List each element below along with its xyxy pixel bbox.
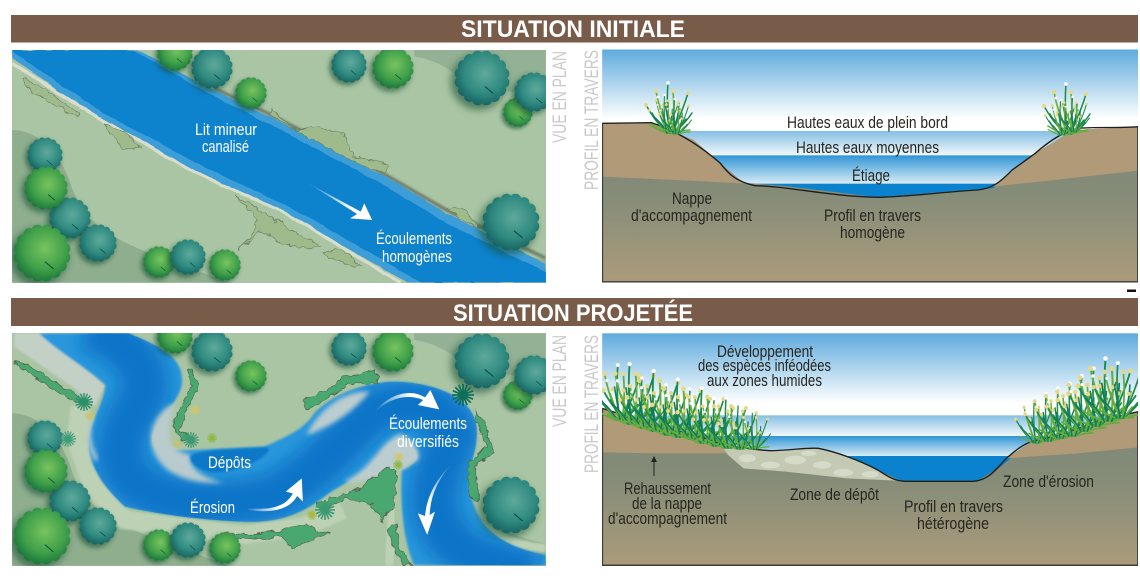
panel: vue en plan projetée — [12, 333, 546, 566]
vegetation: rive gauche — [591, 362, 770, 449]
side labels: situation projetée: PROFIL EN TRAVERS — [582, 335, 603, 473]
vegetation: rive droite — [1042, 82, 1090, 135]
label: écoulements diversifiés — [389, 414, 467, 451]
side labels: situation initiale — [550, 50, 603, 190]
label: nappe d'accompagnement: d'accompagnement — [631, 207, 752, 225]
label: zone d'érosion: Zone d'érosion — [1003, 473, 1094, 491]
label: dépôts: Dépôts — [208, 454, 251, 472]
panel: profil en travers initial — [602, 50, 1138, 282]
label: écoulements homogènes — [376, 229, 452, 266]
panel: vue en plan initiale — [12, 50, 546, 283]
panel: profil en travers projeté — [602, 333, 1138, 566]
label: développement des espèces — [698, 343, 831, 390]
label: écoulements diversifiés: diversifiés — [397, 433, 459, 451]
labels: niveaux d'eau initiaux — [787, 114, 948, 185]
labels: niveaux d'eau initiaux: Hautes eaux moyennes — [796, 139, 939, 157]
labels: niveaux d'eau initiaux: Hautes eaux de plein bord — [787, 114, 948, 132]
label: lit mineur canalisé: Lit mineur — [195, 121, 257, 139]
arrow: rehaussement de la nappe — [651, 456, 657, 476]
label: érosion: Érosion — [190, 498, 235, 517]
label: profil en travers homogène: Profil en travers — [824, 207, 921, 225]
header: situation projetée: SITUATION PROJETÉE — [453, 299, 693, 327]
side labels: situation projetée: VUE EN PLAN — [550, 335, 571, 427]
label: nappe d'accompagnement — [631, 190, 752, 225]
label: profil en travers hétérogène: Profil en travers — [904, 498, 1003, 516]
label: profil en travers homogène — [824, 207, 921, 242]
arrow: érosion — [248, 478, 303, 511]
header: situation initiale — [11, 15, 1138, 43]
label: écoulements homogènes: homogènes — [382, 248, 452, 266]
arrow: écoulement amont — [375, 390, 439, 412]
label: profil en travers hétérogène — [904, 498, 1003, 533]
label: lit mineur canalisé — [195, 121, 257, 156]
label: écoulements homogènes: Écoulements — [376, 229, 452, 248]
label: rehaussement de la nappe: Rehaussement — [624, 480, 711, 498]
label: zone de dépôt: Zone de dépôt — [790, 486, 879, 504]
header: situation initiale: SITUATION INITIALE — [461, 16, 685, 43]
label: développement des espèces: des espèces inféodées — [698, 357, 831, 375]
label: lit mineur canalisé: canalisé — [202, 138, 249, 156]
side labels: situation initiale: PROFIL EN TRAVERS — [582, 50, 603, 190]
label: rehaussement de la nappe: d'accompagnement — [608, 510, 727, 528]
label: nappe d'accompagnement: Nappe — [672, 190, 712, 208]
side labels: situation projetée — [550, 335, 603, 473]
vegetation: rive gauche — [644, 81, 692, 134]
arrow: sens de l'écoulement — [307, 183, 372, 220]
side labels: situation initiale: VUE EN PLAN — [550, 51, 571, 143]
shrubs — [60, 384, 474, 520]
trees — [10, 318, 553, 569]
label: rehaussement de la nappe: de la nappe — [632, 495, 702, 513]
label: rehaussement de la nappe — [608, 480, 727, 528]
arrow: écoulement aval — [418, 465, 451, 535]
label: profil en travers hétérogène: hétérogène — [917, 515, 989, 533]
vegetation: rive droite — [1014, 356, 1140, 443]
header: situation projetée — [11, 298, 1138, 327]
labels: niveaux d'eau initiaux: Étiage — [852, 166, 890, 185]
label: développement des espèces: aux zones humides — [707, 372, 822, 390]
label: profil en travers homogène: homogène — [840, 224, 905, 242]
label: écoulements diversifiés: Écoulements — [389, 414, 467, 433]
trees — [10, 35, 553, 286]
black mark — [1127, 290, 1136, 292]
label: développement des espèces: Développement — [717, 343, 813, 361]
